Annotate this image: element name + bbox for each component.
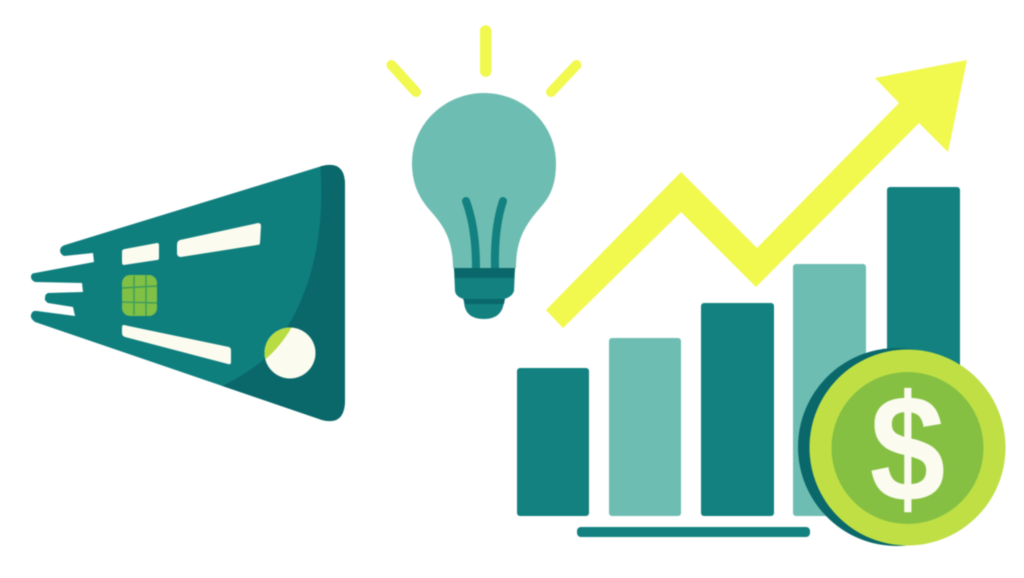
bulb rays: [392, 31, 576, 92]
icon: dollar coin: [798, 348, 1006, 546]
icon: speeding credit card: [30, 164, 346, 422]
bar 3: [701, 303, 774, 516]
dollar sign: $: [870, 363, 945, 534]
icon: light bulb: [392, 31, 576, 319]
bar 2: [609, 338, 681, 516]
bulb glass: [412, 93, 556, 268]
card stripe: top right: [177, 223, 261, 257]
icon: card chip: [122, 275, 157, 316]
card stripe: bottom: [122, 325, 231, 364]
card shaded edge: [222, 164, 346, 422]
bar 4: [793, 264, 866, 516]
card body: [31, 165, 345, 421]
bulb base: [454, 268, 515, 319]
bar 5: [887, 187, 960, 516]
coin shadow: [798, 348, 996, 546]
coin face: [832, 372, 984, 524]
card stripe: top left: [122, 243, 159, 265]
bar chart: [517, 187, 960, 537]
chart baseline: [577, 527, 810, 537]
growth arrow: [546, 60, 967, 328]
bar 1: [517, 368, 589, 516]
bulb filaments: [466, 201, 503, 268]
coin rim: [810, 350, 1006, 546]
card logo circle: [264, 326, 316, 380]
